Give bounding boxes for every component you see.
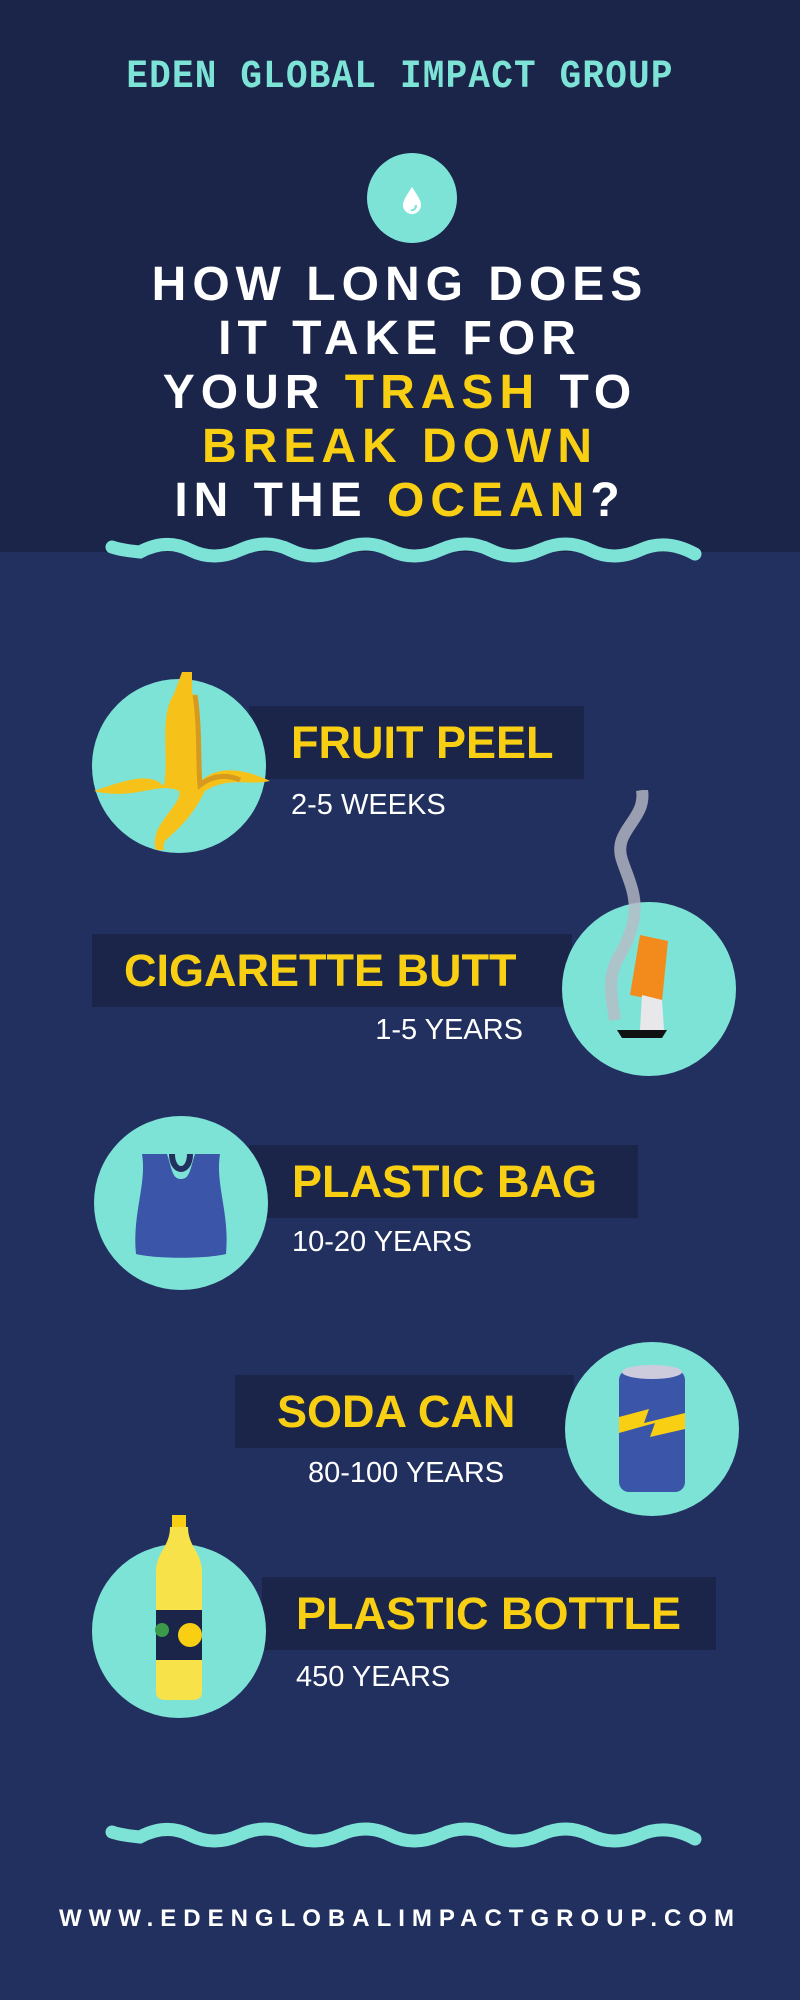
duration: 10-20 YEARS xyxy=(292,1226,472,1258)
title xyxy=(152,258,648,527)
icon: bag xyxy=(135,1154,227,1258)
icon circle xyxy=(562,902,736,1076)
title: IT TAKE FOR xyxy=(218,312,582,365)
title: YOUR TRASH TO xyxy=(163,366,637,419)
header panel xyxy=(0,0,800,552)
duration: 80-100 YEARS xyxy=(308,1457,504,1489)
icon: can xyxy=(619,1365,685,1492)
item: fruit peel xyxy=(92,672,584,853)
label box xyxy=(92,934,572,1007)
duration: 2-5 WEEKS xyxy=(291,789,446,821)
icon: bottle xyxy=(155,1515,202,1700)
brand name: EDEN GLOBAL IMPACT GROUP xyxy=(126,54,674,99)
duration: 1-5 YEARS xyxy=(375,1014,523,1046)
icon: cigarette xyxy=(605,790,668,1038)
icon circle xyxy=(92,1544,266,1718)
label box xyxy=(235,1375,574,1448)
icon: banana xyxy=(94,672,270,850)
item: plastic bag xyxy=(94,1116,638,1290)
title: IN THE OCEAN? xyxy=(174,474,626,527)
icon circle xyxy=(94,1116,268,1290)
label box xyxy=(262,1577,716,1650)
website url: WWW.EDENGLOBALIMPACTGROUP.COM xyxy=(59,1905,741,1932)
label box xyxy=(249,706,584,779)
duration: 450 YEARS xyxy=(296,1661,450,1693)
title: BREAK DOWN xyxy=(202,420,598,473)
label: cigarette butt: CIGARETTE BUTT xyxy=(124,945,516,996)
icon circle: banana peel xyxy=(92,679,266,853)
title: HOW LONG DOES xyxy=(152,258,648,311)
icon: water drop xyxy=(367,153,457,243)
label: plastic bottle: PLASTIC BOTTLE xyxy=(296,1588,681,1639)
label: fruit peel: FRUIT PEEL xyxy=(291,717,554,768)
item: cigarette butt xyxy=(92,790,736,1076)
label: soda can: SODA CAN xyxy=(277,1386,515,1437)
item: soda can xyxy=(235,1342,739,1516)
wave bottom xyxy=(106,1822,702,1848)
wave top xyxy=(106,538,702,562)
label: plastic bag: PLASTIC BAG xyxy=(292,1156,597,1207)
item: plastic bottle xyxy=(92,1515,716,1718)
label box xyxy=(249,1145,638,1218)
icon circle xyxy=(565,1342,739,1516)
